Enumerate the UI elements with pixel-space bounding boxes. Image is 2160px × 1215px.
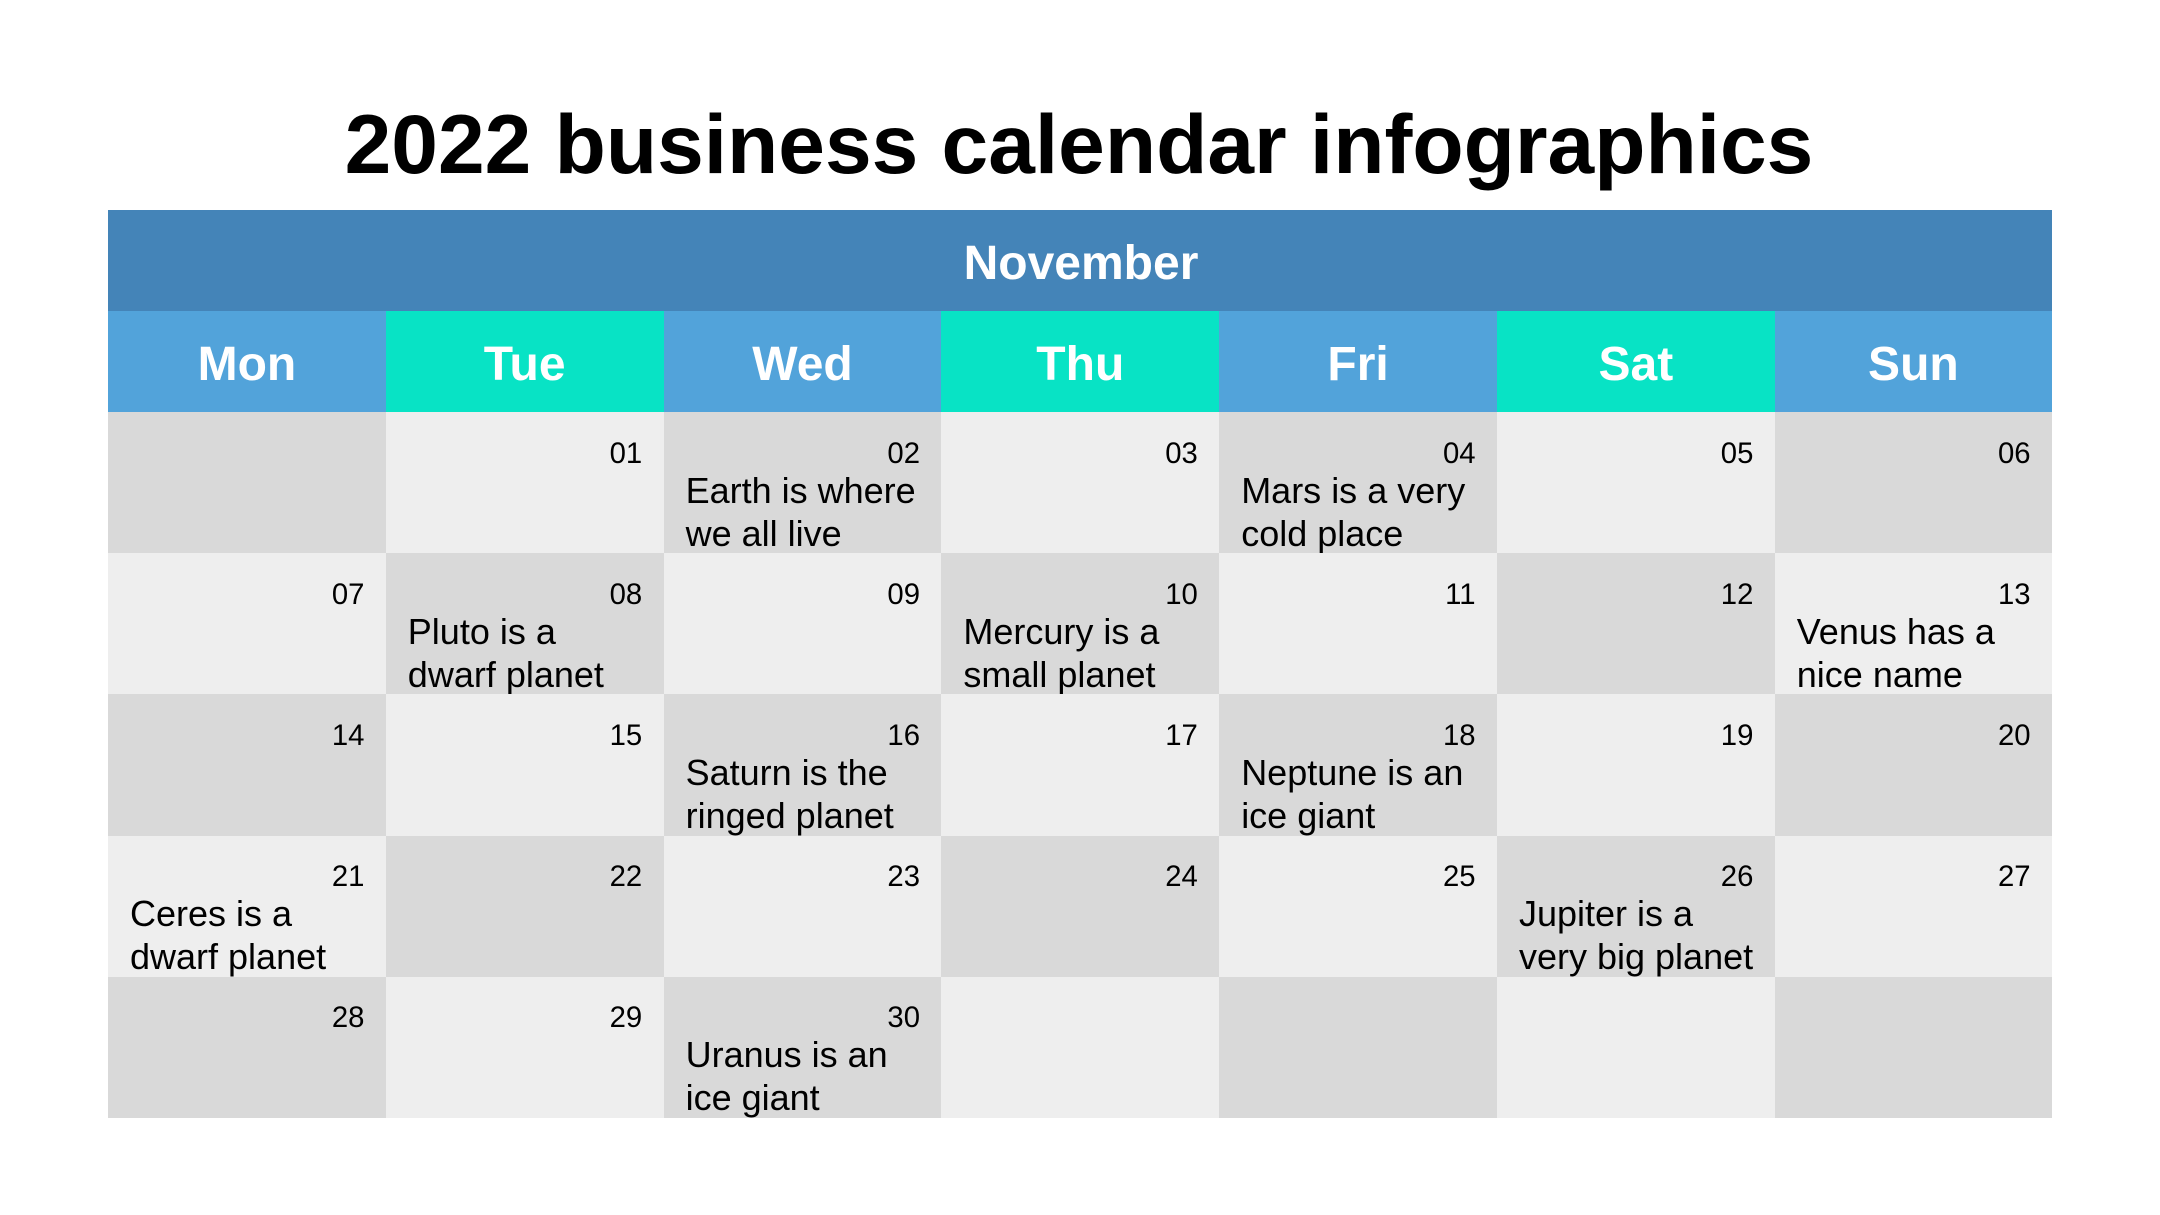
day 02: Earth: 02 <box>887 437 920 470</box>
day 10: Mercury: 10 <box>1165 578 1198 611</box>
weekday: Monday: Mon <box>198 338 296 391</box>
day 01: 01 <box>610 437 642 470</box>
day 02: Earth: Earth is where <box>686 470 916 510</box>
day 15: 15 <box>610 719 642 752</box>
day 30: Uranus: ice giant <box>686 1077 820 1118</box>
month header: November: November <box>964 237 1198 290</box>
weekday: Friday <box>1219 311 1497 412</box>
weekday: Tuesday <box>386 311 664 412</box>
day 27: 27 <box>1998 860 2031 893</box>
day 16: Saturn: Saturn is the <box>686 752 888 793</box>
day 05: 05 <box>1721 437 1753 470</box>
day 09: 09 <box>887 578 920 611</box>
day 29: 29 <box>610 1001 642 1034</box>
day 22: 22 <box>610 860 642 893</box>
month header: November <box>108 210 2054 312</box>
day 20 <box>1775 694 2052 836</box>
day cells grid <box>108 412 2052 1118</box>
day 26: Jupiter: very big planet <box>1519 936 1753 977</box>
weekday header row <box>108 311 2052 412</box>
day 14 <box>108 694 386 836</box>
day 06: 06 <box>1998 437 2031 470</box>
weekday: Saturday <box>1497 311 1775 412</box>
day 13: Venus: nice name <box>1797 654 1963 694</box>
day 06 <box>1775 412 2052 553</box>
day 22 <box>386 836 664 977</box>
calendar table <box>108 210 2052 1118</box>
day 28: 28 <box>332 1001 364 1034</box>
day 04: Mars <box>1219 412 1497 553</box>
day 03: 03 <box>1165 437 1198 470</box>
weekday: Monday <box>108 311 386 412</box>
day 14: 14 <box>332 719 364 752</box>
day 07: 07 <box>332 578 364 611</box>
day 18: Neptune: ice giant <box>1241 795 1375 836</box>
day 13: Venus: Venus has a <box>1797 611 1995 652</box>
day 15 <box>386 694 664 836</box>
day 12 <box>1497 553 1775 694</box>
day 30: Uranus <box>664 977 941 1118</box>
day 25 <box>1219 836 1497 977</box>
day 18: Neptune <box>1219 694 1497 836</box>
day 28 <box>108 977 386 1118</box>
day 10: Mercury <box>941 553 1219 694</box>
day 13: Venus <box>1775 553 2052 694</box>
day 09 <box>664 553 941 694</box>
weekday: Sunday <box>1775 311 2052 412</box>
day 20: 20 <box>1998 719 2031 752</box>
day 27 <box>1775 836 2052 977</box>
day 04: Mars: Mars is a very <box>1241 470 1465 510</box>
day 11 <box>1219 553 1497 694</box>
empty cell <box>108 412 386 553</box>
day 19 <box>1497 694 1775 836</box>
weekday: Thursday: Thu <box>1036 338 1124 391</box>
day 21: Ceres: dwarf planet <box>130 936 326 977</box>
day 17 <box>941 694 1219 836</box>
weekday: Tuesday: Tue <box>484 338 566 391</box>
day 18: Neptune: Neptune is an <box>1241 752 1463 793</box>
day 30: Uranus: 30 <box>887 1001 920 1034</box>
day 16: Saturn <box>664 694 941 836</box>
title: 2022 business calendar infographics <box>345 97 1813 191</box>
day 18: Neptune: 18 <box>1443 719 1476 752</box>
day 21: Ceres <box>108 836 386 977</box>
day 12: 12 <box>1721 578 1753 611</box>
day 23 <box>664 836 941 977</box>
day 26: Jupiter: Jupiter is a <box>1519 893 1693 934</box>
weekday: Wednesday <box>664 311 941 412</box>
day 05 <box>1497 412 1775 553</box>
day 08: Pluto: dwarf planet <box>408 654 604 694</box>
day 19: 19 <box>1721 719 1753 752</box>
day 26: Jupiter <box>1497 836 1775 977</box>
day 25: 25 <box>1443 860 1476 893</box>
day 04: Mars: 04 <box>1443 437 1476 470</box>
day 26: Jupiter: 26 <box>1721 860 1753 893</box>
day 23: 23 <box>887 860 920 893</box>
empty cell <box>941 977 1219 1118</box>
day 13: Venus: 13 <box>1998 578 2031 611</box>
empty cell <box>1219 977 1497 1118</box>
day 11: 11 <box>1445 578 1476 611</box>
day 17: 17 <box>1165 719 1198 752</box>
day 02: Earth <box>664 412 941 553</box>
day 21: Ceres: 21 <box>332 860 364 893</box>
day 07 <box>108 553 386 694</box>
day 24: 24 <box>1165 860 1198 893</box>
day 29 <box>386 977 664 1118</box>
day 16: Saturn: ringed planet <box>686 795 894 836</box>
weekday: Saturday: Sat <box>1599 338 1673 391</box>
day 08: Pluto <box>386 553 664 694</box>
weekday: Sunday: Sun <box>1868 338 1959 391</box>
day 04: Mars: cold place <box>1241 513 1403 553</box>
weekday: Friday: Fri <box>1327 338 1389 391</box>
empty cell <box>1497 977 1775 1118</box>
day 16: Saturn: 16 <box>887 719 920 752</box>
empty cell <box>1775 977 2052 1118</box>
day 02: Earth: we all live <box>686 513 842 553</box>
day 24 <box>941 836 1219 977</box>
weekday: Thursday <box>941 311 1219 412</box>
day 08: Pluto: Pluto is a <box>408 611 556 652</box>
day 10: Mercury: small planet <box>963 654 1155 694</box>
weekday: Wednesday: Wed <box>752 338 853 391</box>
day 21: Ceres: Ceres is a <box>130 893 292 934</box>
day 08: Pluto: 08 <box>610 578 642 611</box>
day 10: Mercury: Mercury is a <box>963 611 1159 652</box>
day 01 <box>386 412 664 553</box>
day 03 <box>941 412 1219 553</box>
day 30: Uranus: Uranus is an <box>686 1034 888 1075</box>
